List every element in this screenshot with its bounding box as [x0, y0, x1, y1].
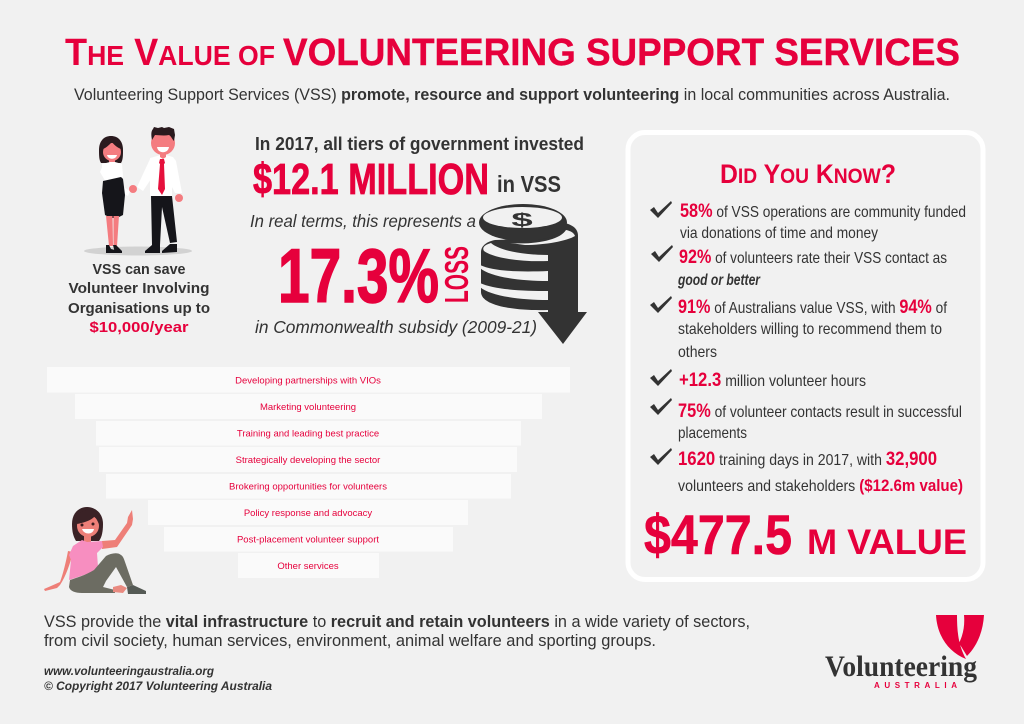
- loss figure: in Commonwealth subsidy (2009-21): [255, 317, 537, 337]
- funnel bar 2: [75, 394, 542, 419]
- fact: contact rating: good or better: [677, 272, 761, 289]
- subtitle: Volunteering Support Services (VSS) promote, resource and support volunteering in local communities across Australia.: [74, 86, 950, 104]
- funnel bar 7: [164, 527, 453, 552]
- funnel bar 6: Policy response and advocacy: [244, 508, 372, 519]
- website and copyright: [44, 664, 272, 693]
- loss figure: [255, 234, 537, 337]
- closing statement: from civil society, human services, environment, animal welfare and sporting groups.: [44, 632, 656, 650]
- title: VOLUNTEERING SUPPORT SERVICES: [283, 32, 960, 74]
- total value: [644, 503, 967, 566]
- loss figure: 17.3%: [278, 234, 439, 319]
- funnel bar 1: [47, 367, 570, 392]
- investment statement: $12.1 MILLION: [253, 155, 489, 204]
- caption: savings: VSS can save: [92, 262, 186, 278]
- investment statement: [250, 134, 584, 231]
- funnel bar 3: [96, 421, 521, 446]
- funnel bar 8: [238, 553, 379, 578]
- funnel bar 4: [99, 447, 517, 472]
- website and copyright: www.volunteeringaustralia.org: [44, 664, 215, 678]
- funnel bar 3: Training and leading best practice: [237, 428, 379, 440]
- icon: seated woman pointing: [44, 507, 146, 594]
- funnel bar 7: Post-placement volunteer support: [237, 534, 379, 546]
- funnel bar 8: Other services: [277, 561, 339, 572]
- fact: placements: 75% of volunteer contacts result in successful: [678, 401, 962, 422]
- fact: training days: [678, 449, 963, 495]
- icon: coin stack with down arrow: [479, 204, 587, 344]
- caption: savings: Organisations up to: [68, 301, 210, 317]
- investment statement: in VSS: [497, 171, 561, 197]
- title: THE VALUE OF: [65, 32, 275, 74]
- funnel bar 2: Marketing volunteering: [260, 402, 356, 413]
- loss figure: LOSS: [438, 246, 475, 303]
- fact: volunteer hours: +12.3 million volunteer hours: [679, 370, 866, 391]
- website and copyright: © Copyright 2017 Volunteering Australia: [44, 679, 272, 693]
- logo: Volunteering Australia: Volunteering: [825, 650, 977, 683]
- logo: Volunteering Australia: [825, 615, 984, 690]
- fact: contact rating: [677, 247, 947, 289]
- fact: community funded: [680, 201, 966, 242]
- logo: Volunteering Australia: AUSTRALIA: [874, 681, 957, 690]
- funnel bar 1: Developing partnerships with VIOs: [235, 376, 381, 386]
- fact: Australians value VSS: stakeholders willing to recommend them to: [678, 321, 942, 338]
- fact: Australians value VSS: 91% of Australians value VSS, with 94% of: [678, 297, 947, 318]
- funnel bar 6: [148, 500, 468, 525]
- caption: savings: [68, 262, 210, 336]
- icon: coin stack with down arrow: $: [511, 210, 533, 230]
- fact: placements: [678, 401, 962, 442]
- fact checkmarks: [650, 201, 673, 465]
- closing statement: [44, 613, 750, 650]
- fact: placements: placements: [678, 425, 747, 442]
- total value: M VALUE: [807, 523, 967, 562]
- fact: contact rating: 92% of volunteers rate their VSS contact as: [679, 247, 947, 268]
- panel: did you know: [628, 132, 983, 580]
- funnel bar 5: [106, 474, 511, 498]
- funnel bar 4: Strategically developing the sector: [236, 455, 380, 466]
- funnel chart: services: [47, 367, 570, 578]
- fact: community funded: 58% of VSS operations are community funded: [680, 201, 966, 222]
- icon: handshake figures: [84, 127, 192, 256]
- caption: savings: Volunteer Involving: [68, 281, 210, 297]
- fact: training days: 1620 training days in 2017, with 32,900: [678, 449, 937, 470]
- total value: $477.5: [644, 503, 792, 566]
- panel heading: DID YOU KNOW?: [720, 159, 896, 189]
- fact: community funded: via donations of time and money: [680, 225, 878, 242]
- fact: Australians value VSS: [678, 297, 947, 361]
- fact: training days: volunteers and stakeholders ($12.6m value): [678, 476, 963, 495]
- investment statement: In real terms, this represents a: [250, 211, 476, 231]
- fact: Australians value VSS: others: [678, 344, 717, 361]
- closing statement: VSS provide the vital infrastructure to recruit and retain volunteers in a wide variety of sectors,: [44, 613, 750, 631]
- funnel bar 5: Brokering opportunities for volunteers: [229, 482, 387, 492]
- caption: savings: $10,000/year: [90, 320, 189, 336]
- investment statement: In 2017, all tiers of government invested: [255, 134, 584, 154]
